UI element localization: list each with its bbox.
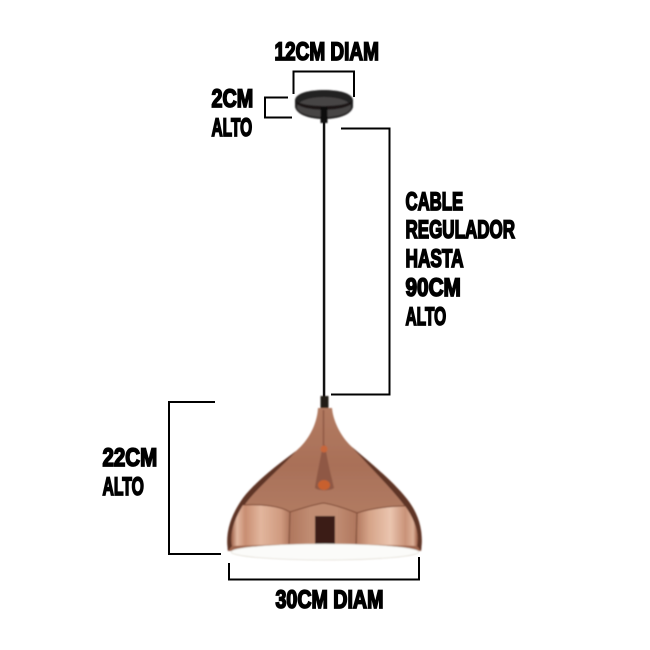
label: 2cm height [212, 85, 253, 142]
label: 22cm height: ALTO [102, 473, 144, 501]
label: cable length: HASTA [406, 245, 464, 273]
cable [323, 120, 325, 400]
label: cable length [406, 188, 515, 331]
label: 22cm height: 22CM [102, 443, 157, 471]
dark edge: right [352, 447, 422, 551]
label: cable length: ALTO [406, 303, 446, 331]
label: 12cm diameter: 12CM DIAM [274, 37, 379, 66]
label: cable length: 90CM [406, 273, 461, 301]
bracket: canopy height [265, 98, 292, 118]
label: cable length: REGULADOR [406, 216, 515, 244]
label: 2cm height: ALTO [212, 114, 252, 142]
window reflection [315, 516, 335, 544]
bracket: cable length [331, 128, 390, 394]
bracket: lamp height [169, 402, 221, 554]
label: 30cm diameter: 30CM DIAM [276, 586, 383, 614]
label: 2cm height: 2CM [212, 85, 253, 113]
lamp shade [227, 396, 422, 560]
bracket: lamp diameter [229, 557, 419, 580]
ceiling canopy [295, 90, 353, 123]
dark edge: left [227, 451, 296, 551]
label: cable length: CABLE [406, 188, 463, 216]
centre band reflection [290, 503, 357, 544]
label: 22cm height [102, 443, 157, 501]
lamp opening [231, 544, 419, 560]
right band reflection [357, 506, 417, 546]
teardrop reflection [315, 445, 334, 490]
left band reflection [231, 505, 290, 546]
bracket: canopy diameter [294, 72, 354, 97]
